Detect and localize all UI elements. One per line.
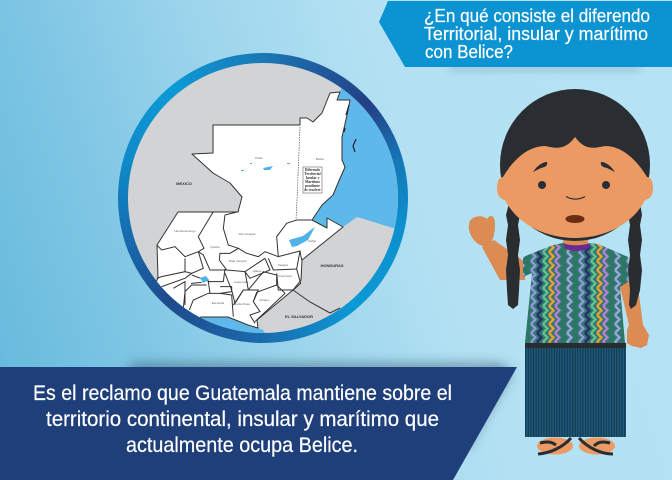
map labels: Quiché [210,245,220,249]
map labels: Huehuetenango [174,229,196,233]
legend box: Insular y [306,176,320,180]
answer banner: Es el reclamo que Guatemala mantiene sobre el [33,382,452,405]
answer banner: territorio continental, insular y marítimo que [46,408,439,431]
answer banner: actualmente ocupa Belice. [126,434,358,457]
character: girl in traditional dress [469,89,653,454]
collar [563,243,590,251]
belt [525,343,626,348]
question banner: ¿En qué consiste el diferendo [424,6,650,26]
map labels: Jalapa [253,269,262,273]
embroidered blouse [523,243,631,343]
map labels: Zacapa [278,263,288,267]
map labels: HONDURAS [320,263,344,268]
El Salvador border [293,290,340,313]
map labels: Baja Verapaz [229,259,247,263]
map labels: Belize [316,157,324,161]
map labels: MEXICO [176,181,192,186]
department boundaries [157,212,312,323]
lakes [200,163,315,283]
question banner [379,1,672,67]
legend box: Territorial [304,172,321,176]
feet and sandals [537,438,615,454]
dashed Belize border [296,127,300,220]
Pacific ocean [179,304,266,333]
map medallion ring [118,53,408,343]
answer banner shadow [130,364,512,450]
left braid [506,203,520,309]
Caribbean sea [312,88,398,228]
Guatemala and Belize land [150,92,350,328]
left arm and waving hand [469,216,525,280]
map labels: EL SALVADOR [285,314,313,319]
face [497,137,653,238]
right arm and hand [618,272,649,348]
neighbouring countries (grey) [128,63,398,333]
right braid [628,203,642,309]
neck [563,232,588,250]
hair [500,89,650,241]
question banner: Territorial, insular y marítimo [424,24,648,44]
map labels: Petén [255,156,263,160]
map labels: Alta Verapaz [238,232,256,236]
answer banner [0,367,517,480]
map labels: Santa Rosa [234,302,250,306]
question banner: con Belice? [425,42,513,62]
question banner shadow [450,66,640,70]
eyebrows [533,162,547,172]
legend box: Diferendo [305,168,320,172]
map labels: Izabal [308,239,316,243]
map labels: Escuintla [212,301,224,305]
map labels: Chiquimula [276,274,292,278]
legend box: Marítimo [305,180,320,184]
skirt [525,348,626,437]
mouth [566,215,584,223]
legend box: de resolver [304,188,321,192]
legend box [303,167,322,193]
Belize cays [344,105,356,152]
map labels: Guatemala [234,280,249,284]
map labels [174,156,344,319]
eyes [538,181,546,189]
map labels: Jutiapa [259,298,269,302]
legend box: pendiente [305,184,320,188]
nose [566,196,585,199]
